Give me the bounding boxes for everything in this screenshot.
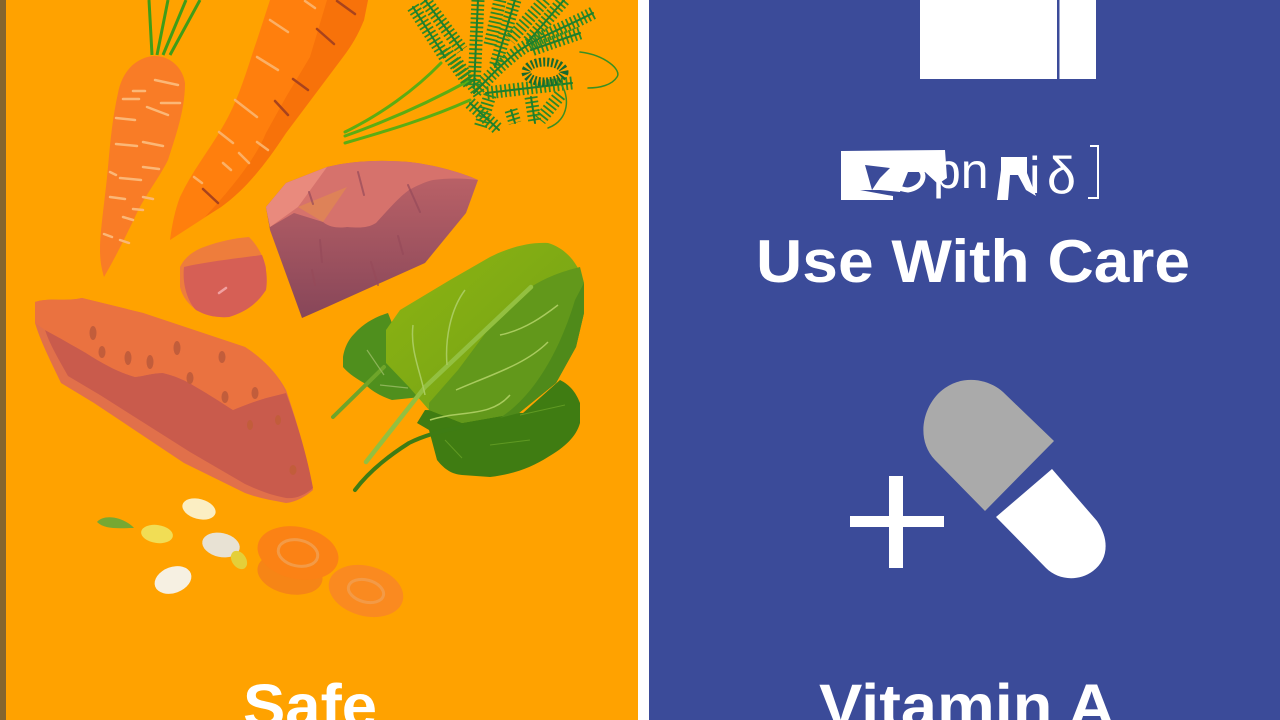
garbled label: δ [1047, 147, 1076, 205]
garbled label: pn [933, 143, 989, 199]
icon: white box [920, 0, 1096, 79]
icon: carrot greens [345, 0, 618, 143]
icon: large carrot [170, 0, 368, 240]
icon: plus [850, 476, 944, 568]
garbled label [841, 143, 1098, 205]
garbled label: i [1029, 147, 1041, 205]
icon: capsule [923, 380, 1106, 578]
panel: use with care [649, 0, 1280, 720]
icon: spinach leaves [333, 243, 584, 490]
panel: safe foods [0, 0, 638, 720]
heading: Use With Care: Use With Care [756, 228, 1190, 295]
icon: small carrot [100, 0, 200, 277]
icon: sweet potato chunk [266, 161, 478, 318]
icon: large sweet potato [35, 298, 313, 503]
icon: sweet potato slice [180, 237, 267, 317]
icon: seeds and slices [97, 495, 409, 625]
